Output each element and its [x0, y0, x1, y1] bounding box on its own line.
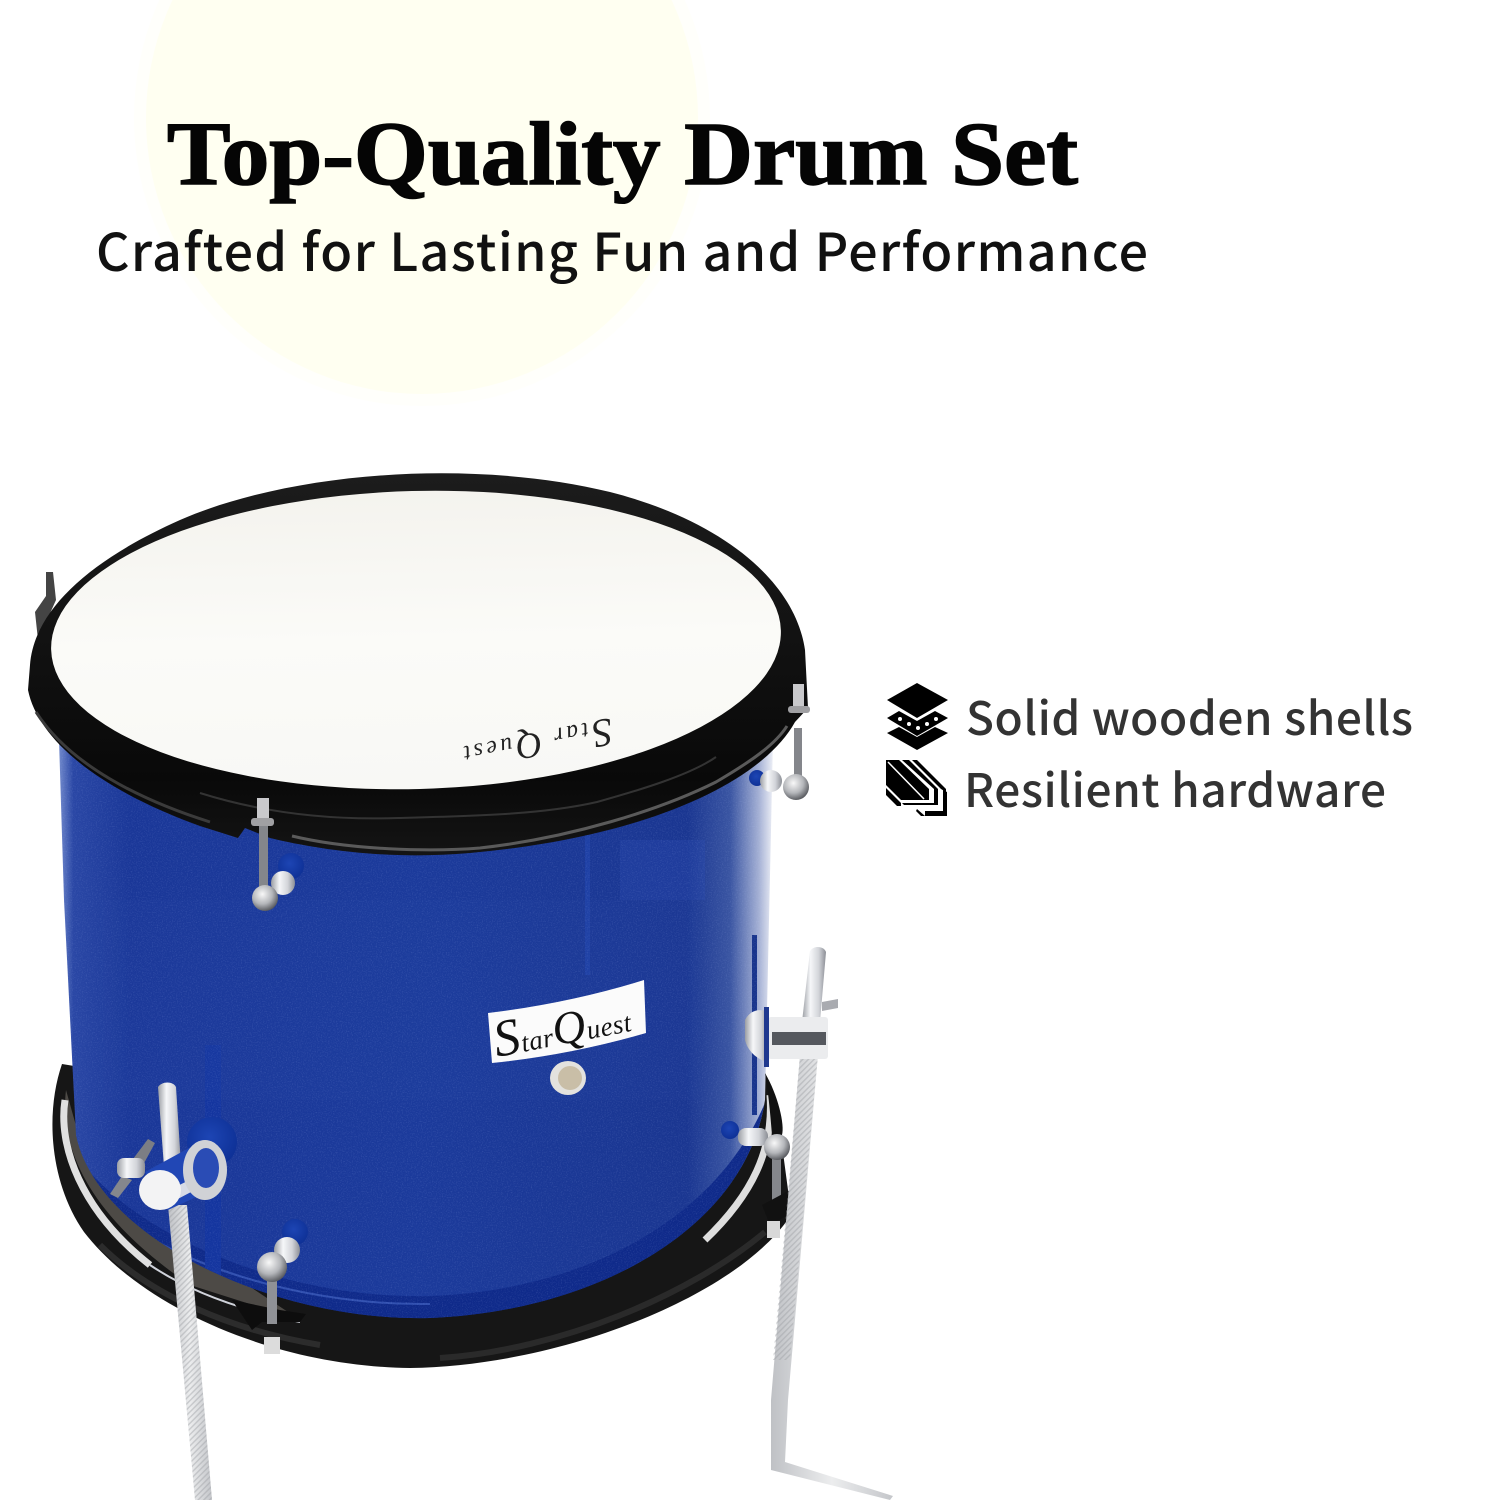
icon: stacked layers	[887, 683, 948, 750]
air vent grommet	[550, 1061, 586, 1095]
feature list	[886, 683, 1413, 821]
tension rod and lug, lower right	[721, 1121, 790, 1238]
title: Top-Quality Drum Set	[167, 105, 1078, 204]
head logo: Star Quest	[460, 709, 617, 782]
feature text: solid wooden shells: Solid wooden shells	[966, 683, 1413, 749]
feature text: resilient hardware: Resilient hardware	[964, 755, 1386, 821]
shell shading and sparkle	[50, 740, 780, 1340]
icon: steel profiles	[886, 760, 947, 816]
tension rod and lug, front right	[749, 684, 810, 800]
tension rod and lug, lower left	[232, 1219, 308, 1354]
right leg with clamp and foot	[745, 947, 893, 1500]
drum product illustration	[28, 473, 893, 1500]
pale yellow background circle	[134, 0, 710, 406]
subtitle: Crafted for Lasting Fun and Performance	[96, 211, 1148, 286]
blue shell	[59, 740, 773, 1318]
lower right black hoop ear	[765, 1073, 783, 1135]
left leg with clamp	[110, 1082, 237, 1500]
brand label: StarQuest	[488, 986, 636, 1069]
drum head	[47, 481, 785, 799]
top hoop	[28, 473, 808, 855]
bottom hoop	[52, 1064, 790, 1368]
tension rod and lug, front left	[251, 798, 304, 911]
